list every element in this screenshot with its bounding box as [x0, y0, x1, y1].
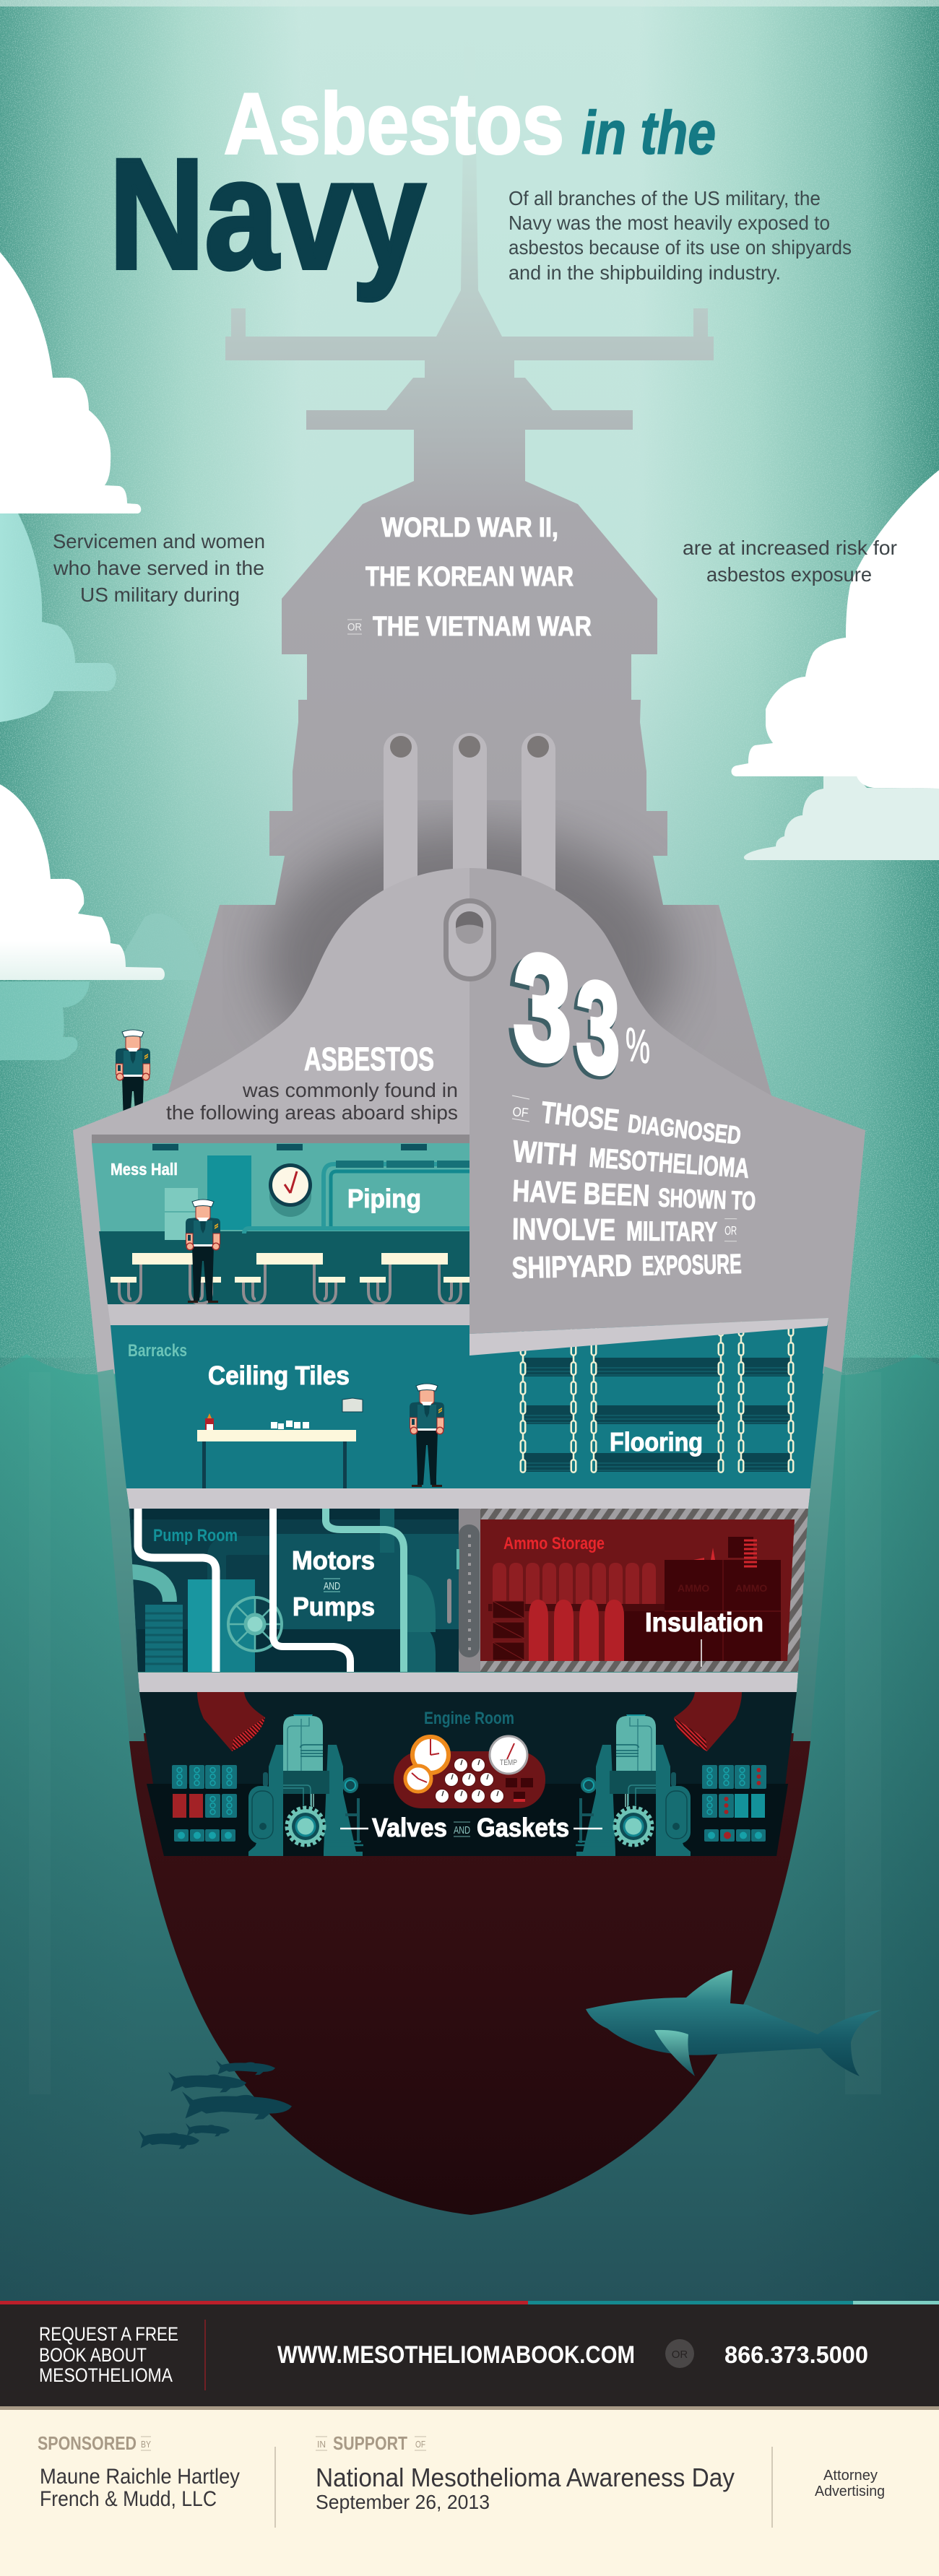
website: WWW.MESOTHELIOMABOOK.COM [277, 2341, 635, 2369]
label: Barracks: Barracks [128, 1341, 187, 1361]
duct left [197, 1692, 265, 1751]
text: servicemen: who have served in the [53, 557, 264, 579]
attorney advertising: Attorney [823, 2468, 878, 2484]
gauge panel: TEMP [500, 1758, 517, 1767]
label: Valves and Gaskets: Valves [372, 1813, 447, 1842]
label: Motors and Pumps [292, 1545, 375, 1621]
table with items [197, 1398, 363, 1488]
bulkhead door [447, 1509, 480, 1672]
cloud: right [731, 470, 939, 789]
intro paragraph [509, 187, 852, 284]
pipes [244, 1164, 470, 1233]
text: servicemen: Servicemen and women [53, 530, 265, 552]
text: wars: THE VIETNAM WAR [373, 612, 592, 642]
hull wall underwater left [98, 1369, 144, 1741]
fish school [139, 2060, 292, 2149]
label: Valves and Gaskets [340, 1813, 602, 1842]
text: increased risk: are at increased risk for [683, 537, 897, 559]
statistic: 33 percent [509, 920, 650, 1106]
awareness day: National Mesothelioma Awareness Day [316, 2463, 735, 2492]
label: Valves and Gaskets: AND [454, 1824, 470, 1836]
intro paragraph: and in the shipbuilding industry. [509, 261, 781, 284]
engine right [576, 1714, 691, 1856]
sponsor name: Maune Raichle Hartley [40, 2465, 240, 2489]
text: those diagnosed: HAVE BEEN [512, 1174, 650, 1213]
statistic: 33 percent: 3 [573, 955, 619, 1106]
mess tables [111, 1253, 470, 1304]
statistic: 33 percent: 3 [576, 953, 620, 1102]
label: Mess Hall: Mess Hall [111, 1160, 178, 1179]
back shells [493, 1563, 656, 1605]
ship superstructure [168, 170, 771, 1096]
text: asbestos found [166, 1041, 458, 1124]
icon: valve wheel [228, 1597, 282, 1651]
text: those diagnosed: OR [724, 1224, 737, 1238]
cloud: faded left [0, 513, 116, 722]
hull left half with turret [73, 868, 470, 1374]
request text [39, 2323, 178, 2386]
intro paragraph: Navy was the most heavily exposed to [509, 212, 830, 234]
guns [384, 733, 555, 921]
label: Pump Room: Pump Room [153, 1526, 238, 1545]
sponsored by: SPONSORED [38, 2432, 137, 2454]
sponsored by: BY [141, 2439, 151, 2450]
icon: wall clock [269, 1163, 312, 1217]
text: those diagnosed: DIAGNOSED [626, 1109, 743, 1150]
title: in the [581, 99, 716, 167]
statistic: 33 percent: % [626, 1018, 650, 1075]
statistic: 33 percent: 3 [509, 924, 569, 1098]
room: mess hall [92, 1135, 470, 1304]
room: pump room [129, 1509, 459, 1672]
text: those diagnosed: THOSE [540, 1095, 621, 1137]
pump room floor [138, 1673, 798, 1692]
request text: MESOTHELIOMA [39, 2364, 173, 2386]
text: those diagnosed [511, 1095, 756, 1285]
label: Piping: Piping [347, 1184, 421, 1213]
label: Motors and Pumps: AND [324, 1580, 340, 1592]
sailor [410, 1384, 444, 1487]
label: Ammo Storage: Ammo Storage [503, 1534, 605, 1553]
sponsor name [40, 2465, 240, 2511]
water [0, 1354, 939, 2304]
background: sky [0, 0, 939, 1379]
text: wars: WORLD WAR II, [381, 513, 558, 543]
intro paragraph: Of all branches of the US military, the [509, 187, 821, 209]
shark [586, 1970, 881, 2076]
text: those diagnosed: INVOLVE [512, 1212, 615, 1246]
gauge panel [394, 1736, 545, 1808]
red lower hull [129, 1733, 810, 2215]
chains [523, 1322, 791, 1470]
label: Motors and Pumps: Pumps [293, 1592, 375, 1621]
texture: grain [0, 0, 939, 1379]
ammo boxes [624, 1537, 781, 1661]
text: wars: THE KOREAN WAR [365, 562, 574, 592]
text: those diagnosed: MILITARY [626, 1216, 717, 1247]
awareness day: September 26, 2013 [316, 2491, 490, 2513]
right panel lower band [470, 1318, 828, 1356]
engine left [248, 1714, 363, 1856]
switch panel left [172, 1765, 237, 1842]
room: engine room [139, 1692, 797, 1856]
text: wars [347, 513, 592, 642]
cloud: right faded [744, 776, 939, 860]
text: those diagnosed: SHOWN TO [658, 1182, 756, 1215]
duct right [674, 1692, 742, 1751]
statistic: 33 percent: 3 [514, 921, 571, 1094]
text: servicemen: US military during [80, 584, 240, 606]
crates [493, 1601, 524, 1660]
text: those diagnosed: OF [512, 1104, 529, 1120]
label: Engine Room: Engine Room [424, 1709, 514, 1728]
barracks floor [126, 1488, 810, 1509]
title [109, 75, 716, 301]
cloud: upper left [0, 252, 141, 513]
ammo boxes: AMMO [678, 1582, 709, 1594]
footer: sponsors [0, 2410, 939, 2576]
attorney advertising: Advertising [815, 2484, 885, 2499]
or badge: OR [672, 2349, 688, 2361]
label: Motors and Pumps: Motors [292, 1545, 375, 1575]
text: asbestos found: was commonly found in [242, 1079, 458, 1101]
text: wars: OR [347, 621, 362, 633]
panel: right hull with turret [470, 868, 865, 1374]
text: those diagnosed: EXPOSURE [641, 1249, 742, 1282]
intro paragraph: asbestos because of its use on shipyards [509, 236, 852, 259]
text: increased risk: asbestos exposure [706, 563, 872, 586]
mess floor [108, 1304, 470, 1325]
text: increased risk [683, 537, 897, 586]
awareness day [316, 2463, 735, 2513]
text: those diagnosed: MESOTHELIOMA [588, 1142, 750, 1184]
sailor [186, 1200, 220, 1303]
request text: BOOK ABOUT [39, 2344, 147, 2366]
in support of: SUPPORT [333, 2432, 407, 2454]
pipes [326, 1509, 404, 1672]
bunks [524, 1358, 791, 1472]
footer: call to action [0, 2304, 939, 2410]
front shells [529, 1600, 624, 1661]
room: ammo storage [480, 1509, 808, 1672]
text: asbestos found: the following areas aboard ships [166, 1101, 458, 1124]
ammo boxes: AMMO [735, 1582, 767, 1594]
text: servicemen [53, 530, 265, 606]
label: Flooring: Flooring [610, 1427, 703, 1457]
attorney advertising [815, 2468, 885, 2499]
sailor on deck [116, 1030, 150, 1133]
cloud: lower left back [108, 914, 204, 980]
in support of: IN [317, 2439, 326, 2450]
room: barracks [111, 1322, 828, 1488]
phone: 866.373.5000 [724, 2341, 868, 2368]
in support of: OF [415, 2439, 425, 2450]
cloud: lower left faded [0, 981, 90, 1060]
title: Navy [109, 126, 425, 301]
switch panel right [702, 1765, 766, 1842]
icon: turret porthole [443, 898, 496, 981]
or badge [665, 2339, 694, 2368]
footer stripe [0, 2301, 939, 2304]
text: asbestos found: ASBESTOS [304, 1041, 434, 1077]
text: those diagnosed: WITH [511, 1134, 578, 1172]
cloud: lower left [0, 784, 165, 980]
title: Asbestos [224, 75, 564, 172]
label: Ceiling Tiles: Ceiling Tiles [208, 1361, 350, 1390]
label: Insulation: Insulation [645, 1608, 763, 1637]
label: Valves and Gaskets: Gaskets [477, 1813, 569, 1842]
text: those diagnosed: SHIPYARD [511, 1248, 632, 1285]
request text: REQUEST A FREE [39, 2323, 178, 2345]
sponsor name: French & Mudd, LLC [40, 2487, 217, 2511]
hull wall underwater right [793, 1366, 841, 1741]
